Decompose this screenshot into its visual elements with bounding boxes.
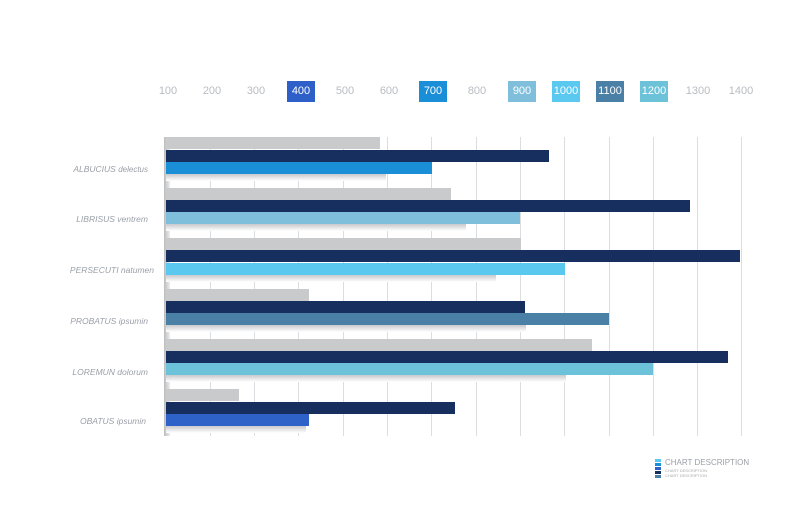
category labels: LOREMUN dolorum	[72, 367, 148, 377]
axis scale: 1100	[598, 85, 622, 97]
axis scale: 200	[203, 85, 221, 97]
axis scale: 700	[424, 85, 442, 97]
axis scale: 1000	[554, 85, 578, 97]
axis scale: 600	[380, 85, 398, 97]
axis scale: 1200	[642, 85, 666, 97]
category labels: PROBATUS ipsumin	[70, 316, 148, 326]
group 4	[166, 289, 309, 301]
group 2	[166, 188, 451, 200]
axis scale: 800	[468, 85, 486, 97]
axis scale: 900	[513, 85, 531, 97]
category labels: LIBRISUS ventrem	[76, 214, 148, 224]
axis scale: 500	[336, 85, 354, 97]
legend: chart description	[655, 458, 749, 478]
category labels: ALBUCIUS delectus	[73, 164, 148, 174]
axis scale: 400	[292, 85, 310, 97]
axis scale: 1400	[729, 85, 753, 97]
category labels	[70, 164, 154, 426]
axis scale	[159, 81, 753, 102]
axis scale: 1300	[686, 85, 710, 97]
axis scale: 300	[247, 85, 265, 97]
bar chart	[164, 137, 742, 436]
legend: chart description: CHART DESCRIPTION	[665, 473, 707, 478]
group 5	[166, 339, 592, 351]
group 6	[166, 389, 239, 401]
axis scale: 100	[159, 85, 177, 97]
group 1	[166, 137, 380, 149]
category labels: OBATUS ipsumin	[80, 416, 146, 426]
group 3	[166, 238, 521, 250]
category labels: PERSECUTI natumen	[70, 265, 154, 275]
legend: chart description: CHART DESCRIPTION	[665, 458, 749, 467]
legend: chart description: CHART DESCRIPTION	[665, 468, 707, 473]
